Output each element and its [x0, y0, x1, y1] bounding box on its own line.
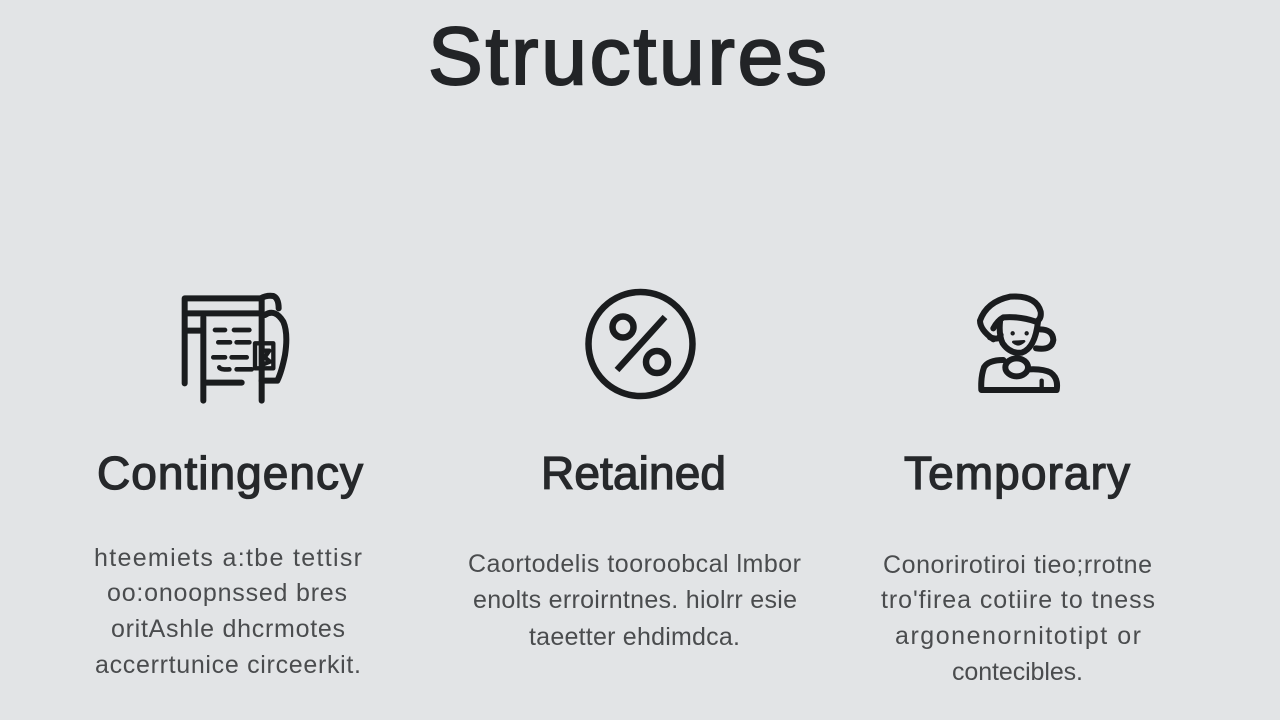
- text block: retained description: enolts erroirntnes. hiolrr esie: [473, 586, 797, 614]
- text block: contingency description: oritAshle dhcrmotes: [111, 615, 345, 643]
- text block: retained description: [468, 550, 801, 651]
- text block: temporary description: Conorirotiroi tieo;rrotne: [883, 551, 1152, 579]
- panel: contingency: [94, 296, 363, 679]
- text block: contingency description: [94, 544, 362, 679]
- heading: Retained: Retained: [541, 447, 726, 499]
- panel: retained: [468, 292, 801, 651]
- heading: Contingency: Contingency: [97, 447, 363, 499]
- icon: document with bars: [185, 296, 286, 401]
- text block: temporary description: contecibles.: [952, 658, 1083, 686]
- icon: percent in circle: [588, 292, 692, 396]
- text block: temporary description: [881, 551, 1155, 686]
- text block: contingency description: oo:onoopnssed bres: [107, 579, 347, 607]
- text block: temporary description: tro'firea cotiire to tness: [881, 586, 1155, 614]
- text block: retained description: Caortodelis tooroobcal lmbor: [468, 550, 801, 578]
- title: Structures: [428, 11, 827, 102]
- text block: temporary description: argonenornitotipt or: [895, 622, 1141, 650]
- panel: temporary: [881, 297, 1155, 686]
- text block: retained description: taeetter ehdimdca.: [529, 623, 740, 651]
- icon: person with headset: [980, 297, 1057, 390]
- text block: contingency description: hteemiets a:tbe tettisr: [94, 544, 362, 572]
- heading: Temporary: Temporary: [904, 447, 1130, 499]
- text block: contingency description: accerrtunice circeerkit.: [95, 651, 361, 679]
